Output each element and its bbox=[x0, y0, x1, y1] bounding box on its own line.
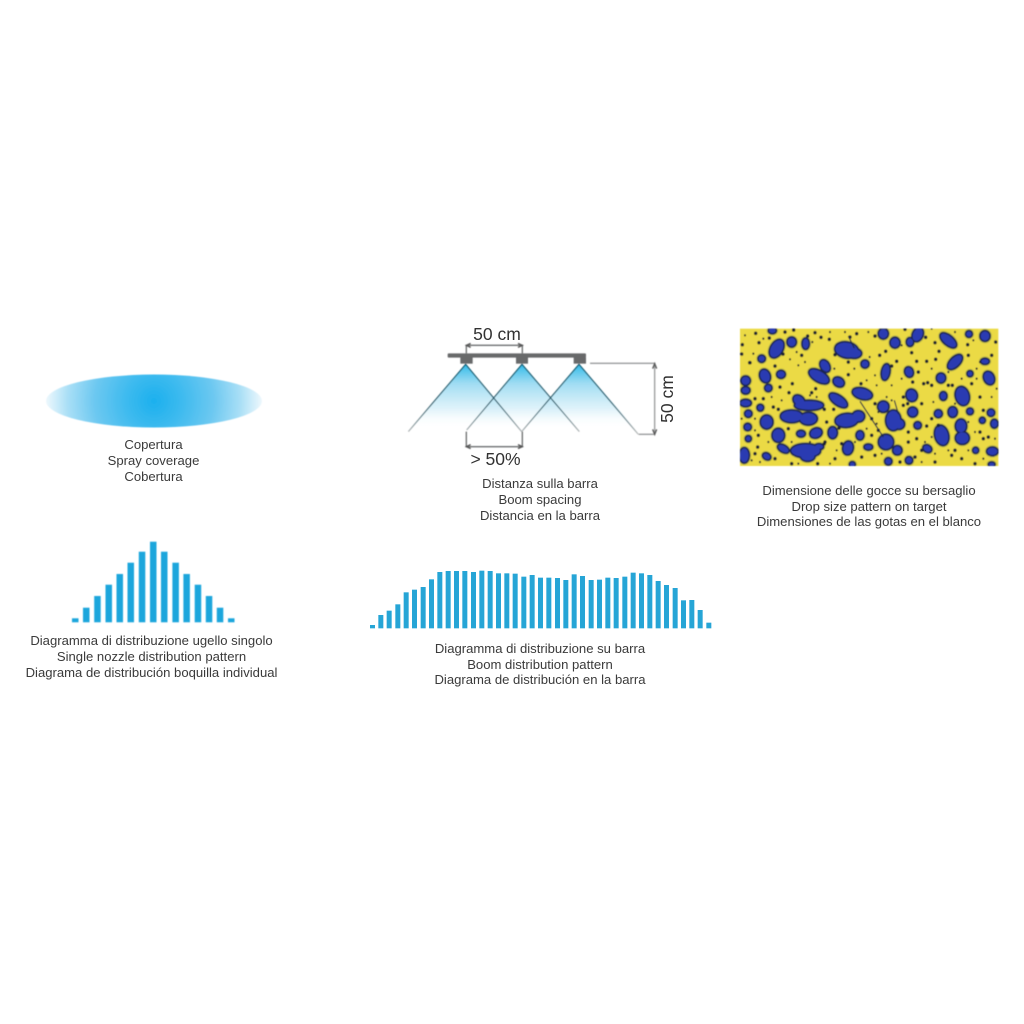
panel: boom spacing bbox=[408, 324, 677, 523]
caption: boom spacing bbox=[480, 476, 601, 523]
panel: single nozzle distribution bbox=[26, 542, 278, 680]
panel: drop size pattern bbox=[740, 327, 998, 529]
caption: drop size pattern: Drop size pattern on target bbox=[791, 499, 947, 514]
caption: drop size pattern: Dimensiones de las gotas en el blanco bbox=[757, 514, 981, 529]
panel: spray coverage bbox=[46, 374, 262, 484]
caption: boom spacing: Boom spacing bbox=[499, 492, 581, 507]
spray coverage ellipse bbox=[46, 374, 262, 428]
caption: spray coverage: Cobertura bbox=[124, 469, 183, 484]
label: greater than 50 percent: > 50% bbox=[470, 449, 521, 469]
caption: spray coverage: Spray coverage bbox=[108, 453, 199, 468]
panel: boom distribution bbox=[370, 571, 711, 687]
spray cones bbox=[408, 364, 638, 434]
caption: boom distribution: Boom distribution pattern bbox=[467, 657, 613, 672]
caption: single nozzle: Diagramma di distribuzione ugello singolo bbox=[30, 633, 273, 648]
boom bar and nozzles bbox=[448, 353, 586, 364]
caption: spray coverage bbox=[108, 437, 199, 484]
caption: boom distribution: Diagrama de distribución en la barra bbox=[434, 672, 646, 687]
caption: single nozzle bbox=[26, 633, 278, 680]
caption: boom distribution: Diagramma di distribuzione su barra bbox=[435, 641, 646, 656]
caption: single nozzle: Diagrama de distribución boquilla individual bbox=[26, 665, 278, 680]
caption: boom spacing: Distanza sulla barra bbox=[482, 476, 599, 491]
caption: single nozzle: Single nozzle distribution pattern bbox=[57, 649, 246, 664]
label: 50 cm vertical: 50 cm bbox=[657, 375, 677, 423]
caption: boom distribution bbox=[434, 641, 646, 687]
caption: spray coverage: Copertura bbox=[124, 437, 183, 452]
caption: drop size pattern bbox=[757, 483, 981, 529]
caption: drop size pattern: Dimensione delle gocce su bersaglio bbox=[762, 483, 976, 498]
caption: boom spacing: Distancia en la barra bbox=[480, 508, 601, 523]
bar chart: boom distribution bbox=[370, 571, 711, 628]
dimension lines bbox=[466, 343, 657, 449]
drop size photo bbox=[740, 327, 998, 466]
label: 50 cm horizontal: 50 cm bbox=[473, 324, 521, 344]
bar chart: single nozzle bbox=[72, 542, 234, 622]
boom spacing diagram bbox=[408, 343, 657, 449]
